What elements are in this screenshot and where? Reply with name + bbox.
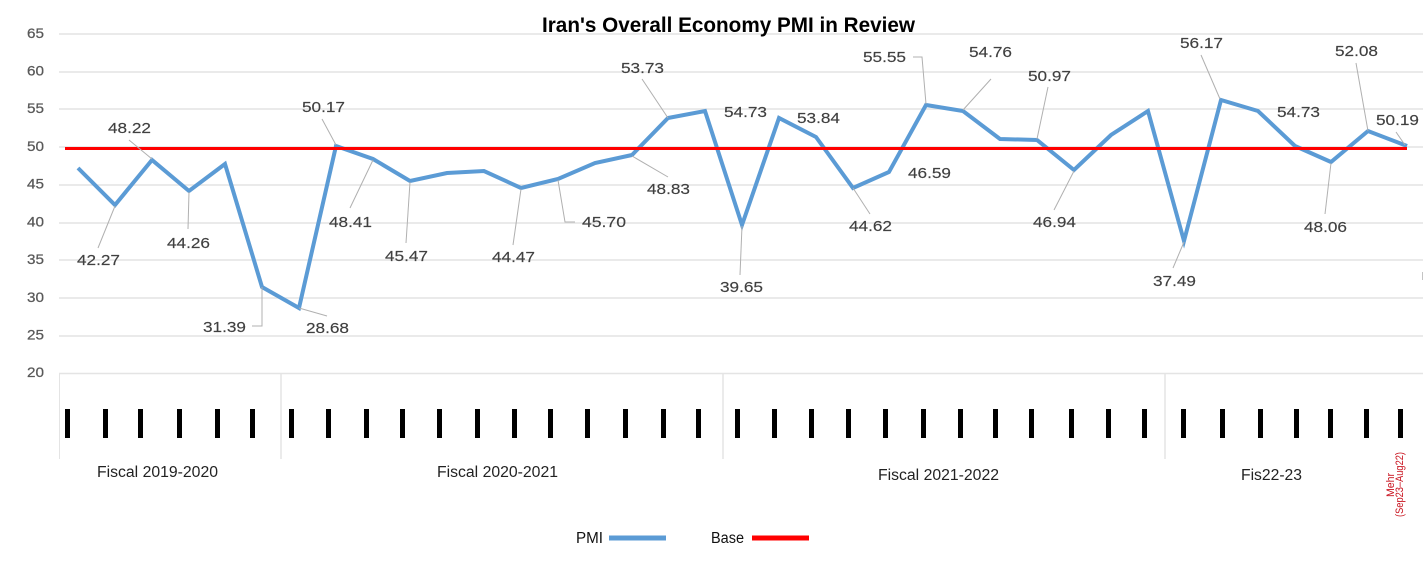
data label: 55.55 bbox=[863, 49, 926, 104]
data label: 44.26 bbox=[167, 192, 210, 252]
PMI line series bbox=[78, 100, 1407, 308]
category label: Fiscal 2021-2022: Fiscal 2021-2022 bbox=[878, 467, 999, 484]
base line at 50 bbox=[65, 147, 1407, 150]
data label: 52.08 bbox=[1335, 43, 1378, 131]
data label: 53.84: 53.84 bbox=[797, 110, 840, 127]
data label: 50.17: 50.17 bbox=[302, 99, 345, 116]
legend: Base: Base bbox=[711, 530, 744, 547]
y axis labels: 30 bbox=[27, 290, 44, 305]
month tick marks bbox=[65, 409, 1403, 438]
title: Iran's Overall Economy PMI in Review bbox=[542, 14, 916, 37]
data label: 45.47 bbox=[385, 182, 428, 265]
y axis labels: 50 bbox=[27, 139, 44, 154]
data label: 45.70: 45.70 bbox=[582, 214, 626, 231]
data label: 42.27: 42.27 bbox=[77, 252, 120, 269]
y axis labels: 60 bbox=[27, 64, 44, 78]
category label: Fis22-23: Fis22-23 bbox=[1241, 467, 1302, 484]
data label: 50.19: 50.19 bbox=[1376, 112, 1419, 129]
data label: 50.19 bbox=[1376, 112, 1419, 145]
legend: PMI: PMI bbox=[576, 530, 603, 547]
data label: 48.06: 48.06 bbox=[1304, 219, 1347, 236]
data label: 44.47 bbox=[492, 189, 535, 266]
data label: 48.22: 48.22 bbox=[108, 120, 151, 137]
data label: 48.41: 48.41 bbox=[329, 214, 372, 231]
data label: 44.62 bbox=[849, 188, 892, 235]
data label: 48.41 bbox=[329, 160, 373, 231]
rotated month label: Mehr bbox=[1385, 452, 1406, 517]
data label: 54.73: 54.73 bbox=[724, 104, 767, 121]
data label: 42.27 bbox=[77, 206, 120, 269]
data label: 45.70 bbox=[558, 180, 626, 231]
data label: 46.94 bbox=[1033, 171, 1076, 231]
data label: 39.65: 39.65 bbox=[720, 279, 763, 296]
data label: 56.17 bbox=[1180, 35, 1223, 99]
data label: 48.06 bbox=[1304, 163, 1347, 236]
data label: 48.83: 48.83 bbox=[647, 181, 690, 198]
data label: 45.47: 45.47 bbox=[385, 248, 428, 265]
data label: 46.59: 46.59 bbox=[908, 165, 951, 182]
data label: 28.68: 28.68 bbox=[306, 320, 349, 337]
y axis labels bbox=[27, 26, 44, 380]
data label: 46.94: 46.94 bbox=[1033, 214, 1076, 231]
data label: 54.76: 54.76 bbox=[969, 44, 1012, 61]
data label: 56.17: 56.17 bbox=[1180, 35, 1223, 52]
category label: Fiscal 2019-2020: Fiscal 2019-2020 bbox=[97, 464, 218, 481]
data label: 48.83 bbox=[632, 156, 690, 198]
data label: 44.26: 44.26 bbox=[167, 235, 210, 252]
data label: 50.97: 50.97 bbox=[1028, 68, 1071, 85]
data label: 54.73 second: 54.73 bbox=[1277, 104, 1320, 121]
data label: 31.39 bbox=[203, 287, 262, 336]
legend: Base bbox=[711, 530, 809, 547]
data label: 53.73: 53.73 bbox=[621, 60, 664, 77]
data label: 50.97 bbox=[1028, 68, 1071, 139]
data label: 37.49: 37.49 bbox=[1153, 273, 1196, 290]
data label: 39.65 bbox=[720, 226, 763, 296]
data label: 31.39: 31.39 bbox=[203, 319, 246, 336]
data label: 44.62: 44.62 bbox=[849, 218, 892, 235]
data label: 50.17 bbox=[302, 99, 345, 145]
rotated month label: Mehr: (Sep23–Aug22) bbox=[1394, 452, 1406, 517]
data label: 55.55: 55.55 bbox=[863, 49, 906, 66]
legend bbox=[576, 530, 809, 547]
y axis labels: 25 bbox=[27, 328, 44, 342]
data label: 37.49 bbox=[1153, 242, 1196, 290]
data label: 48.22 bbox=[108, 120, 152, 159]
y axis labels: 45 bbox=[27, 176, 44, 192]
data label: 44.47: 44.47 bbox=[492, 249, 535, 266]
category label: Fiscal 2020-2021: Fiscal 2020-2021 bbox=[437, 464, 558, 481]
y axis labels: 65 bbox=[27, 26, 44, 41]
legend: PMI bbox=[576, 530, 666, 547]
data label: 52.08: 52.08 bbox=[1335, 43, 1378, 60]
y axis labels: 35 bbox=[27, 252, 44, 267]
y axis labels: 20 bbox=[27, 365, 44, 380]
data label: 54.76 bbox=[963, 44, 1012, 110]
data label: 53.73 bbox=[621, 60, 668, 118]
y axis labels: 55 bbox=[27, 101, 44, 116]
y axis labels: 40 bbox=[27, 214, 44, 230]
rotated month label: Mehr: Mehr bbox=[1385, 473, 1397, 497]
data label: 28.68 bbox=[299, 308, 349, 337]
